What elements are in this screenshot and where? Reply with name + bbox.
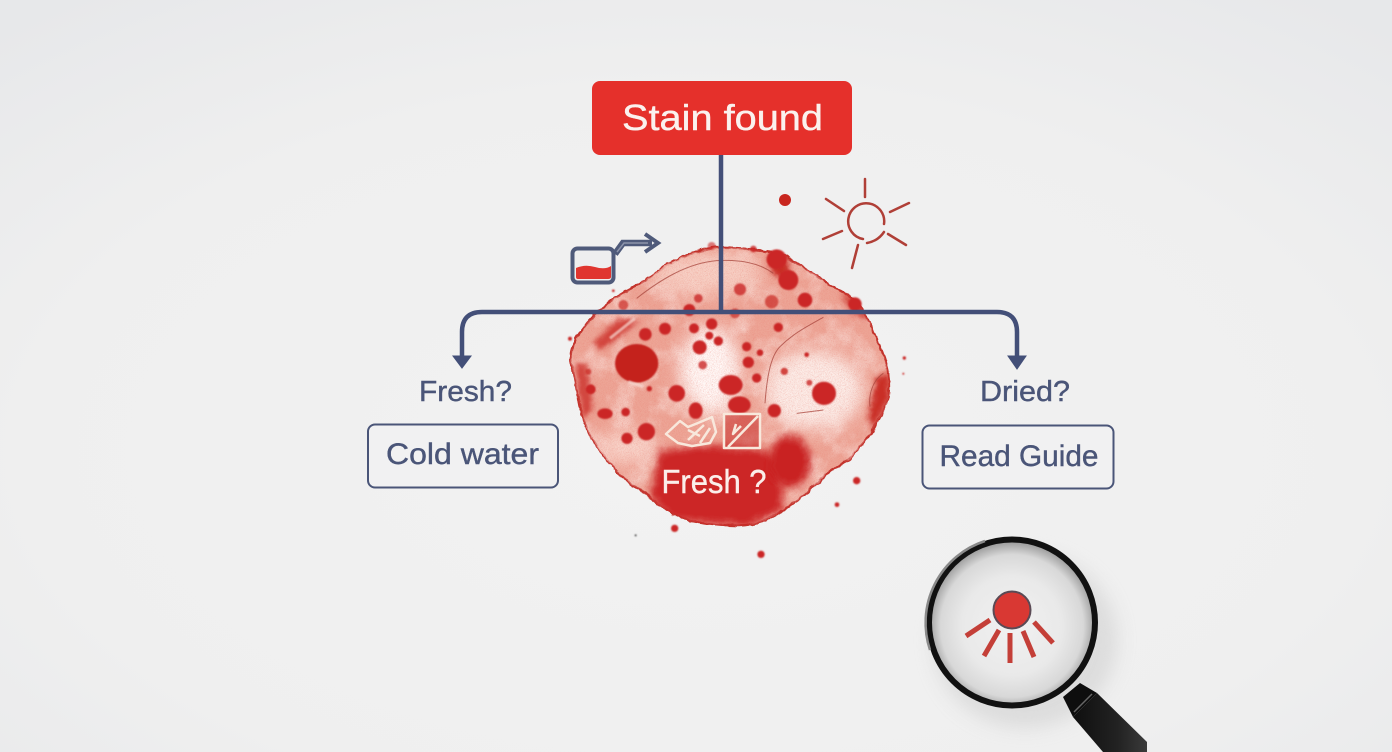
label: fresh: Fresh? bbox=[419, 376, 512, 408]
outside droplets bbox=[671, 525, 678, 532]
stain spots bbox=[568, 242, 906, 558]
icon: sun bbox=[823, 179, 909, 268]
box: read guide: Read Guide bbox=[940, 440, 1098, 473]
lens rim highlight bbox=[926, 541, 985, 650]
flowchart connector bbox=[453, 154, 1026, 369]
stain cracks bbox=[637, 260, 883, 413]
handle bbox=[1063, 683, 1147, 752]
box: cold water bbox=[368, 424, 558, 488]
lens shadow bbox=[933, 552, 1117, 728]
box: read guide bbox=[922, 426, 1114, 488]
magnifying glass bbox=[926, 540, 1147, 752]
icon: pot pouring bbox=[572, 234, 658, 282]
box: stain found: Stain found bbox=[622, 97, 823, 138]
label: dried: Dried? bbox=[980, 376, 1070, 408]
red dot bbox=[994, 592, 1030, 628]
red rays bbox=[966, 620, 1053, 663]
lens bbox=[929, 540, 1095, 706]
crease highlights bbox=[610, 318, 643, 387]
stain blot bbox=[560, 242, 906, 558]
top red droplet bbox=[779, 194, 791, 206]
box: stain found bbox=[592, 81, 852, 155]
stain label: fresh: Fresh ? bbox=[662, 463, 766, 500]
box: cold water: Cold water bbox=[386, 438, 539, 471]
icon: fabric and timer bbox=[666, 414, 760, 448]
